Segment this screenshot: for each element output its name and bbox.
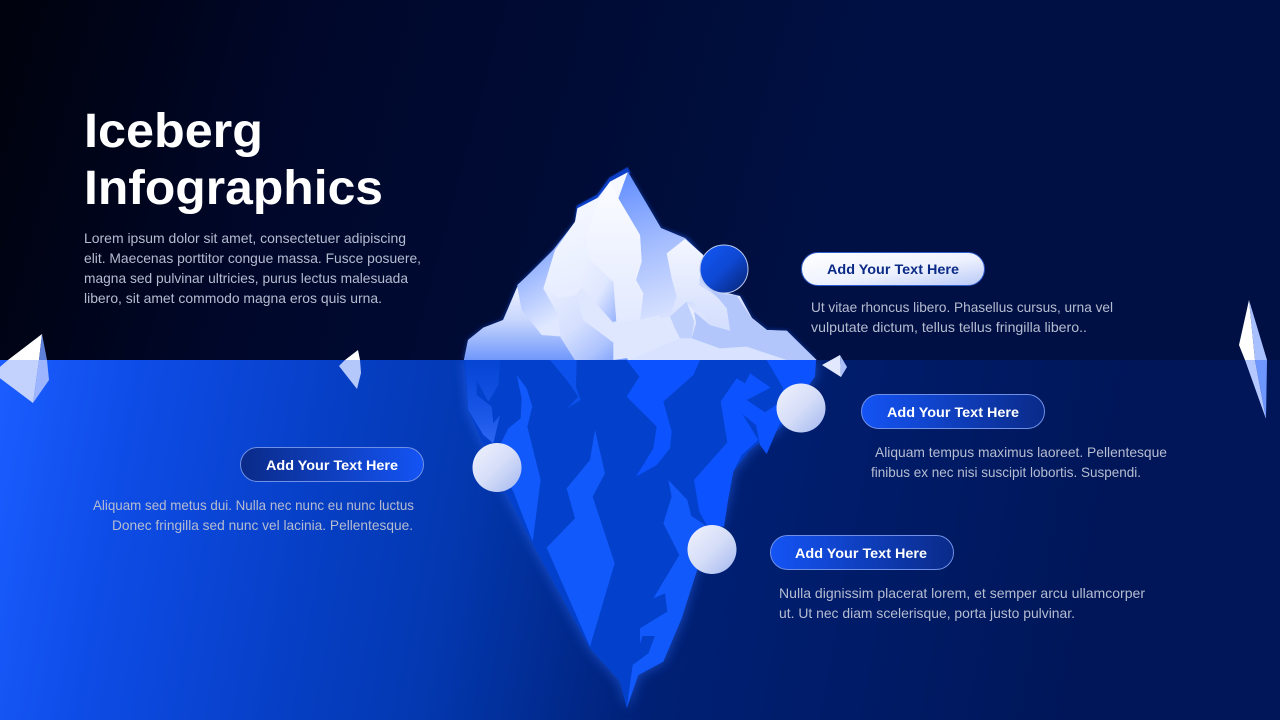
ice crystal: right edge (1239, 300, 1267, 419)
iceberg marker: circle two (776, 384, 826, 432)
callout: left: Donec fringilla sed nunc vel lacinia. Pellentesque. (112, 517, 413, 533)
title: Infographics (84, 162, 383, 215)
callout: bottom right: ut. Ut nec diam scelerisque, porta justo pulvinar. (779, 605, 1075, 621)
callout: top right (802, 252, 1113, 335)
callout: bottom right (770, 536, 1145, 621)
callout: left: Aliquam sed metus dui. Nulla nec nunc eu nunc luctus (93, 497, 414, 513)
callout: middle right (862, 394, 1167, 480)
ice crystal: small left (339, 350, 361, 389)
iceberg marker: blue circle (700, 245, 748, 293)
intro text (84, 230, 421, 306)
intro text: elit. Maecenas porttitor congue massa. Fusce posuere, (84, 250, 421, 266)
callout: bottom right: Nulla dignissim placerat lorem, et semper arcu ullamcorper (779, 585, 1145, 601)
callout: middle right: Aliquam tempus maximus laoreet. Pellentesque (875, 444, 1167, 460)
callout: bottom right: Add Your Text Here (795, 545, 927, 561)
title: Iceberg (84, 105, 263, 158)
callout: top right: Ut vitae rhoncus libero. Phasellus cursus, urna vel (811, 299, 1113, 315)
callout: middle right: Add Your Text Here (887, 404, 1019, 420)
intro text: libero, sit amet commodo magna eros quis urna. (84, 290, 382, 306)
background: ocean water (0, 360, 1280, 720)
intro text: magna sed pulvinar ultricies, purus lectus malesuada (84, 270, 408, 286)
intro text: Lorem ipsum dolor sit amet, consectetuer adipiscing (84, 230, 406, 246)
iceberg: visible tip (464, 167, 817, 360)
background: night sky (0, 0, 1280, 360)
callout: left (93, 448, 424, 533)
iceberg marker: circle four (688, 525, 736, 574)
title (84, 105, 383, 215)
ice crystal: small centre (822, 355, 847, 377)
iceberg: submerged part (464, 360, 816, 708)
iceberg marker: circle three (472, 443, 522, 492)
ice crystal: left edge (0, 334, 49, 403)
callout: left: Add Your Text Here (266, 457, 398, 473)
callout: top right: vulputate dictum, tellus tellus fringilla libero.. (811, 319, 1087, 335)
callout: middle right: finibus ex nec nisi suscipit lobortis. Suspendi. (871, 464, 1141, 480)
callout: top right: Add Your Text Here (827, 261, 959, 277)
